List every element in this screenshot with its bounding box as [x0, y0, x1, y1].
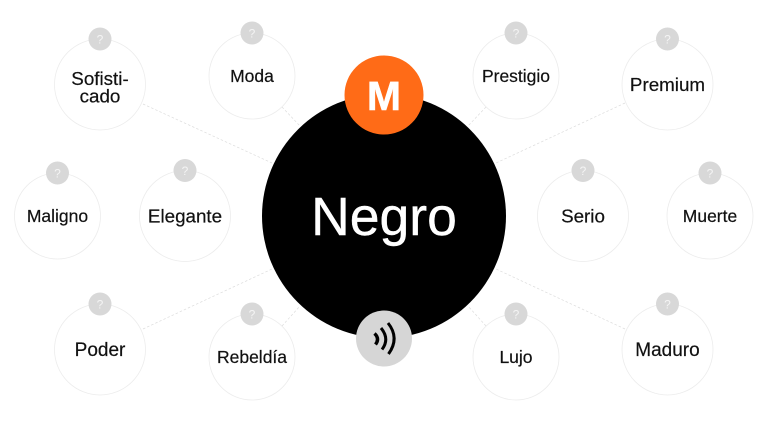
node: Maligno: Maligno: [27, 206, 88, 226]
node: Rebeldía: Rebeldía: [217, 347, 287, 367]
node: Maligno: [14, 162, 100, 259]
node: Maduro: ?: [664, 298, 671, 312]
central circle: Negro: Negro: [311, 188, 457, 247]
node: Premium: [622, 28, 713, 130]
node: Maligno: ?: [54, 166, 61, 180]
node: Rebeldía: [209, 302, 295, 400]
node: Muerte: Muerte: [683, 206, 737, 226]
node: Poder: [54, 292, 146, 395]
node: Muerte: ?: [707, 166, 714, 180]
node: Maduro: Maduro: [635, 340, 700, 361]
node: Serio: ?: [580, 164, 587, 178]
node: Sofisticado: cado: [80, 86, 120, 106]
node: Serio: Serio: [561, 206, 605, 226]
node: Rebeldía: ?: [249, 308, 256, 322]
node: Moda: [209, 22, 295, 119]
node: Moda: ?: [249, 26, 256, 40]
node: Muerte: [667, 162, 753, 259]
node: Elegante: ?: [182, 164, 189, 178]
node: Poder: ?: [97, 298, 104, 312]
node: Premium: ?: [664, 32, 671, 46]
node: Elegante: Elegante: [148, 206, 222, 226]
node: Lujo: ?: [513, 308, 520, 322]
node: Poder: Poder: [75, 340, 126, 361]
node: Premium: Premium: [630, 74, 705, 95]
connector lines: [143, 103, 625, 329]
node: Sofisticado: [54, 28, 146, 130]
node: Prestigio: Prestigio: [482, 66, 550, 86]
node: Serio: [538, 159, 628, 262]
central circle: Negro: [262, 94, 506, 338]
node: Prestigio: [473, 22, 559, 119]
badge: orange M logo: M: [367, 73, 401, 119]
icon: sound waves badge: [356, 310, 412, 366]
node: Sofisticado: Sofisti-: [71, 68, 129, 89]
badge: orange M logo: [344, 56, 424, 134]
node: Lujo: [473, 302, 559, 400]
node: Maduro: [622, 292, 713, 395]
node: Moda: Moda: [230, 66, 274, 86]
node: Lujo: Lujo: [499, 347, 533, 367]
node: Sofisticado: ?: [97, 32, 104, 46]
node: Prestigio: ?: [513, 26, 520, 40]
node: Elegante: [140, 159, 230, 262]
